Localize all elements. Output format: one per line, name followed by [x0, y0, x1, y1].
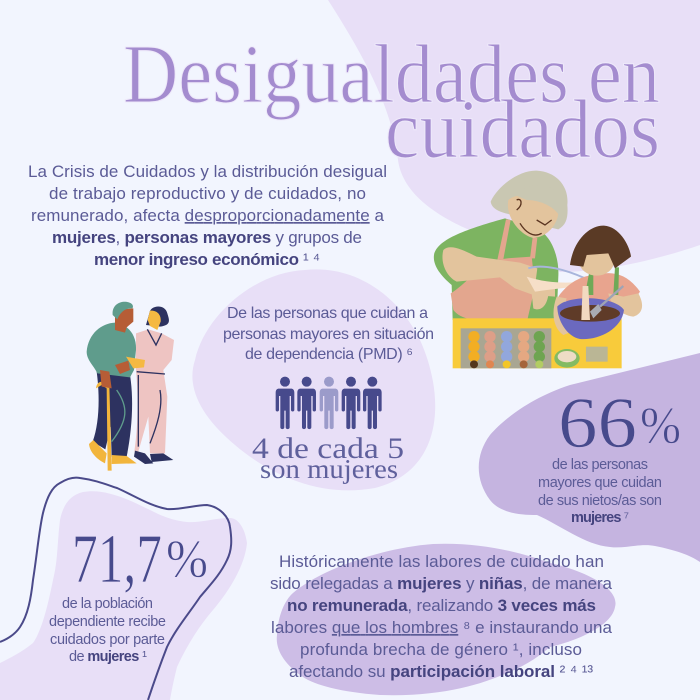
- statistic: 66%: %: [640, 398, 681, 455]
- text block: 66% caption: mujeres ⁷: [571, 510, 629, 526]
- statistic: 71,7%: 71,7: [72, 521, 162, 598]
- text block: PMD: De las personas que cuidan a: [227, 305, 428, 322]
- dress: grandmother: [434, 218, 558, 320]
- man head: [115, 308, 133, 333]
- table: [453, 318, 622, 368]
- girl arms: [553, 293, 642, 335]
- girl head: [579, 248, 614, 276]
- text block: 71,7% caption: de mujeres ¹: [69, 649, 147, 665]
- blob: center panel: [192, 269, 435, 490]
- tray: [461, 328, 551, 368]
- girl hair: [570, 226, 631, 268]
- text block: historical context: Históricamente las labores de cuidado han: [279, 552, 604, 571]
- man trousers: [93, 372, 132, 457]
- face: grandmother: [508, 195, 558, 238]
- hands: [115, 361, 130, 374]
- text block: intro: La Crisis de Cuidados y la distribución desigual: [28, 162, 387, 181]
- girl body: [558, 273, 640, 303]
- text block: PMD: de dependencia (PMD) ⁶: [245, 346, 413, 363]
- text block: 71,7% caption: dependiente recibe: [49, 614, 166, 630]
- text block: historical context: sido relegadas a mujeres y niñas, de manera: [270, 574, 613, 593]
- text block: historical context: profunda brecha de género ¹, incluso: [300, 640, 582, 659]
- mixing bowl: [557, 298, 624, 339]
- man shoes: [89, 440, 137, 464]
- text block: 66% caption: [538, 457, 662, 526]
- text block: intro: [28, 162, 387, 269]
- back hair: grandmother: [491, 171, 568, 229]
- text block: PMD: personas mayores en situación: [223, 326, 434, 343]
- woman head: [146, 306, 169, 327]
- woman shoes: [134, 451, 173, 464]
- text block: 66% caption: de sus nietos/as son: [538, 493, 662, 509]
- icon: five people: [276, 377, 382, 429]
- whisk: [600, 286, 623, 307]
- blob: historical text panel: [277, 544, 616, 695]
- utensils: [586, 347, 608, 362]
- face details: [517, 199, 552, 235]
- title: [123, 28, 660, 176]
- illustration: caregiver and older man: [87, 302, 174, 471]
- batter stream: [581, 286, 590, 320]
- text block: intro: de trabajo reproductivo y de cuidados, no: [49, 184, 366, 203]
- text block: 71,7% caption: [49, 596, 166, 665]
- text block: 71,7% caption: de la población: [62, 596, 153, 612]
- title: cuidados: [385, 83, 660, 176]
- text block: PMD: [223, 305, 434, 363]
- statistic: 66%: [558, 383, 681, 463]
- title: Desigualdades en: [123, 28, 660, 121]
- text block: historical context: labores que los hombres ⁸ e instaurando una: [271, 618, 613, 637]
- woman clothes: [134, 329, 174, 453]
- statistic: 4 de cada 5: [252, 432, 404, 484]
- statistic: 4 de cada 5: son mujeres: [260, 454, 398, 484]
- text block: intro: mujeres, personas mayores y grupos de: [52, 228, 362, 247]
- front hair: grandmother: [515, 185, 564, 220]
- text block: intro: menor ingreso económico ¹ ⁴: [94, 250, 320, 269]
- statistic: 4 de cada 5: 4 de cada 5: [252, 432, 404, 465]
- blob: 71,7% panel: [0, 491, 247, 700]
- text block: 71,7% caption: cuidados por parte: [50, 632, 165, 648]
- man sweater: [87, 323, 136, 377]
- text block: 66% caption: de las personas: [552, 457, 648, 473]
- dish: [527, 277, 583, 292]
- cane: [96, 382, 112, 471]
- statistic: 66%: 66: [558, 383, 637, 463]
- apron: grandmother: [451, 257, 535, 323]
- text block: 66% caption: mayores que cuidan: [538, 475, 662, 491]
- blob: 66% panel: [479, 353, 700, 562]
- arm: grandmother: [442, 247, 555, 297]
- small bowl: [554, 349, 580, 368]
- text block: historical context: [270, 552, 613, 681]
- blob: top right background: [328, 0, 700, 272]
- illustration: grandmother and girl baking: [434, 171, 642, 368]
- text block: historical context: afectando su participación laboral ² ⁴ ¹³: [289, 662, 593, 681]
- outline: 71,7% panel: [0, 478, 231, 700]
- text block: intro: remunerado, afecta desproporcionadamente a: [31, 206, 385, 225]
- statistic: 71,7%: %: [166, 529, 208, 589]
- text block: historical context: no remunerada, realizando 3 veces más: [287, 596, 596, 615]
